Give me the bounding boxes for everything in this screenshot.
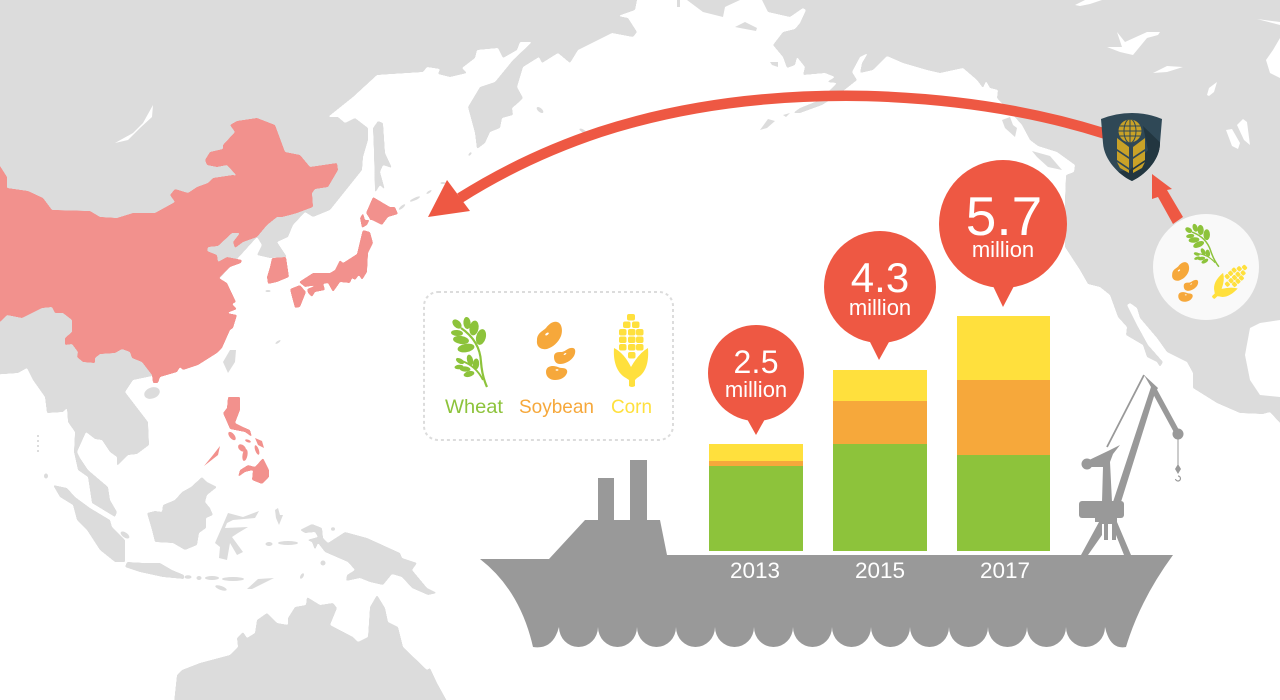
map: Alaska west islands xyxy=(677,0,790,130)
long arrow: export route to Asia xyxy=(428,96,1106,217)
icon: wheat xyxy=(451,317,488,387)
map: Gulf of Mexico xyxy=(1245,320,1280,397)
icon: wheat small xyxy=(1183,220,1219,273)
icon: corn small xyxy=(1205,258,1253,305)
ship silhouette xyxy=(480,460,1173,647)
callout: 2013 value: 2.5 xyxy=(734,344,778,380)
map: Lake Baikal xyxy=(115,105,153,143)
map: Sakhalin xyxy=(373,121,392,193)
year labels: 2017 xyxy=(980,558,1030,583)
icon: soybeans small xyxy=(1172,262,1198,302)
chart: stacked bar 2017 xyxy=(957,316,1050,551)
chart: stacked bar 2015 xyxy=(833,370,927,551)
map: Asia landmass xyxy=(0,0,637,517)
map: Australia xyxy=(173,595,453,700)
map: Philippines xyxy=(204,397,269,484)
short arrow: grains to shield xyxy=(1152,174,1183,224)
map: north Pacific small islands xyxy=(143,106,587,401)
crane xyxy=(1079,375,1184,555)
label: soybean: Soybean xyxy=(519,396,594,418)
map: northern Canada lakes and bays xyxy=(1075,0,1280,149)
map: Southeast Asia islands xyxy=(38,435,437,595)
label: wheat: Wheat xyxy=(445,396,504,418)
callout: 2015 value: 4.3 xyxy=(851,254,909,301)
callout: 2017 value: 5.7 xyxy=(966,185,1042,247)
year labels: 2013 xyxy=(730,558,780,583)
icon: soybean xyxy=(537,322,575,380)
callout: 2013 value xyxy=(708,325,804,435)
callout: 2015 value xyxy=(824,231,936,360)
callout: 2017 value xyxy=(939,160,1067,307)
panel: crop legend xyxy=(424,292,673,440)
icon: shield logo xyxy=(1101,113,1162,181)
icon: corn xyxy=(614,314,648,387)
map: Canadian coast islands xyxy=(1002,117,1062,170)
map: North America xyxy=(760,0,1280,430)
grain circle with icons xyxy=(1153,214,1259,320)
year labels: 2015 xyxy=(855,558,905,583)
map: South Korea xyxy=(267,257,289,284)
map: Japan xyxy=(290,197,398,308)
callout: 2017 value: million xyxy=(972,237,1034,262)
year labels xyxy=(730,558,1030,583)
map: China xyxy=(0,118,338,383)
chart: stacked bar 2013 xyxy=(709,444,803,551)
callout: 2013 value: million xyxy=(725,377,787,402)
label: corn: Corn xyxy=(611,396,652,418)
callout: 2015 value: million xyxy=(849,295,911,320)
